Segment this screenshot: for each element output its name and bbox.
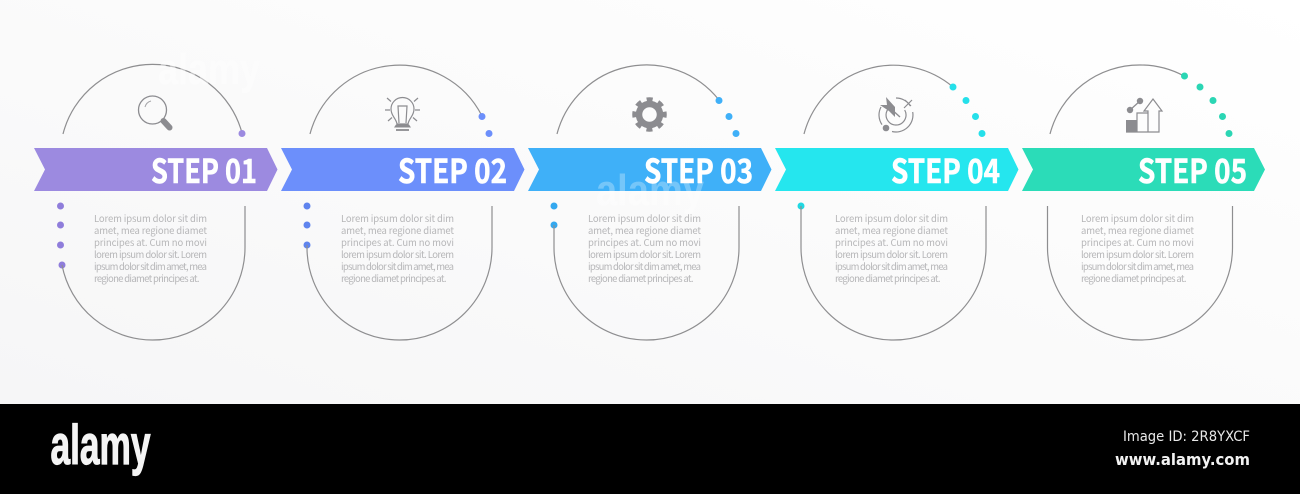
body text step 5: amet, mea regione diamet xyxy=(1081,223,1194,237)
panel: step 1 xyxy=(34,64,278,340)
body text step 1: ipsum dolor sit dim amet, mea xyxy=(94,259,207,273)
body text step 4: Lorem ipsum dolor sit dim xyxy=(835,211,948,225)
panel: step 2 xyxy=(281,65,524,340)
panel: step 5 xyxy=(1022,65,1265,340)
arrow banner step 5 xyxy=(1022,148,1265,191)
bottom arc step 1 xyxy=(62,206,245,340)
body text step 4 xyxy=(835,211,948,285)
body text step 4: ipsum dolor sit dim amet, mea xyxy=(835,259,948,273)
icon: magnifier xyxy=(138,96,170,128)
body text step 1: lorem ipsum dolor sit. Lorem xyxy=(94,247,207,261)
body text step 2: ipsum dolor sit dim amet, mea xyxy=(341,259,454,273)
progress dots top step 1 xyxy=(238,130,246,137)
body text step 5: lorem ipsum dolor sit. Lorem xyxy=(1081,247,1194,261)
step 3 label: STEP 03 xyxy=(644,145,753,193)
body text step 1: principes at. Cum no movi xyxy=(94,235,207,249)
progress dots top step 3 xyxy=(716,97,740,137)
body text step 2: principes at. Cum no movi xyxy=(341,235,454,249)
body text step 3: regione diamet principes at. xyxy=(588,271,694,285)
website: www.alamy.com xyxy=(1115,450,1250,469)
progress dots top step 2 xyxy=(478,113,492,137)
body text step 4: principes at. Cum no movi xyxy=(835,235,948,249)
icon: growth chart xyxy=(1126,98,1162,132)
body text step 3: amet, mea regione diamet xyxy=(588,223,701,237)
arrow banner step 3 xyxy=(528,148,772,191)
body text step 1: regione diamet principes at. xyxy=(94,271,200,285)
icon: target with dart xyxy=(879,97,913,132)
body text step 3: ipsum dolor sit dim amet, mea xyxy=(588,259,701,273)
watermark centre: alamy xyxy=(596,166,704,215)
body text step 3 xyxy=(588,211,701,285)
bottom arc step 2 xyxy=(307,206,492,340)
body text step 4: lorem ipsum dolor sit. Lorem xyxy=(835,247,948,261)
step 4 label: STEP 04 xyxy=(891,145,1000,193)
alamy logo: alamy xyxy=(50,413,150,476)
dots left step 1 xyxy=(57,202,66,268)
body text step 5 xyxy=(1081,211,1194,285)
body text step 2: amet, mea regione diamet xyxy=(341,223,454,237)
top arc step 2 xyxy=(310,65,482,134)
dots left step 2 xyxy=(304,202,310,248)
body text step 1: amet, mea regione diamet xyxy=(94,223,207,237)
icon: light bulb xyxy=(385,98,420,130)
bottom arc step 3 xyxy=(554,206,739,340)
body text step 3: lorem ipsum dolor sit. Lorem xyxy=(588,247,701,261)
arrow banner step 4 xyxy=(775,148,1018,191)
footer band xyxy=(0,404,1300,494)
body text step 5: regione diamet principes at. xyxy=(1081,271,1186,285)
body text step 3: Lorem ipsum dolor sit dim xyxy=(588,211,701,225)
body text step 1 xyxy=(94,211,207,285)
top arc step 4 xyxy=(804,65,953,134)
body text step 2 xyxy=(341,211,454,285)
step 1 label: STEP 01 xyxy=(151,145,257,193)
image id: Image ID: 2R8YXCF xyxy=(1123,429,1250,445)
top arc step 5 xyxy=(1050,65,1184,134)
body text step 2: Lorem ipsum dolor sit dim xyxy=(341,211,454,225)
bottom arc step 4 xyxy=(801,206,986,340)
step 5 label: STEP 05 xyxy=(1138,145,1247,193)
body text step 1: Lorem ipsum dolor sit dim xyxy=(94,211,207,225)
dots left step 3 xyxy=(550,202,558,228)
top arc step 1 xyxy=(63,64,242,134)
icon: gear xyxy=(634,100,664,130)
panel: step 4 xyxy=(775,65,1018,340)
body text step 4: amet, mea regione diamet xyxy=(835,223,948,237)
watermark top: alamy xyxy=(158,45,260,94)
body text step 5: ipsum dolor sit dim amet, mea xyxy=(1081,259,1194,273)
panel: step 3 xyxy=(528,65,772,340)
body text step 2: regione diamet principes at. xyxy=(341,271,446,285)
bottom arc step 5 xyxy=(1048,206,1232,340)
progress dots top step 5 xyxy=(1181,72,1232,137)
arrow banner step 1 xyxy=(34,148,278,191)
arrow banner step 2 xyxy=(281,148,524,191)
step 2 label: STEP 02 xyxy=(398,145,507,193)
body text step 2: lorem ipsum dolor sit. Lorem xyxy=(341,247,454,261)
body text step 4: regione diamet principes at. xyxy=(835,271,940,285)
top arc step 3 xyxy=(557,65,719,134)
body text step 3: principes at. Cum no movi xyxy=(588,235,701,249)
progress dots top step 4 xyxy=(950,84,986,137)
body text step 5: principes at. Cum no movi xyxy=(1081,235,1194,249)
dots left step 4 xyxy=(798,202,804,210)
body text step 5: Lorem ipsum dolor sit dim xyxy=(1081,211,1194,225)
